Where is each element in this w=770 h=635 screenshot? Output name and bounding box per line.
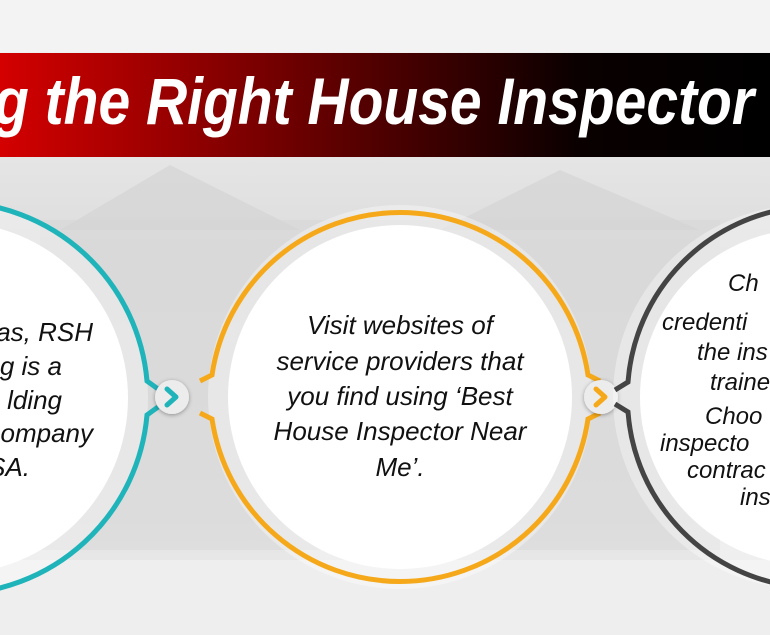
panel: step 1: g is a [0, 351, 62, 381]
panel: step 3: contrac [687, 457, 766, 484]
panel: step 2: service providers that [276, 346, 525, 376]
panel: step 3: traine [710, 369, 770, 396]
panel: step 1: lding [7, 385, 63, 415]
panel: step 1: ompany [0, 418, 95, 448]
panel: step 3: credenti [662, 309, 748, 336]
panel: step 2: Visit websites of [307, 310, 496, 340]
panel: step 3: Choo [705, 403, 762, 430]
panel: step 3: the ins [697, 339, 768, 366]
panel: step 2 [200, 205, 600, 589]
panel: step 3: Ch [728, 270, 759, 297]
panel: step 3: ins [740, 484, 770, 511]
panel: step 1 [0, 202, 158, 594]
arrow 2 [584, 380, 618, 414]
panel: step 2: Me’. [375, 452, 425, 482]
panel: step 2: House Inspector Near [274, 416, 528, 446]
panel: step 2: you find using ‘Best [285, 381, 515, 411]
arrow 1 [155, 380, 189, 414]
panel: step 3 [613, 205, 770, 589]
panel: step 3: inspecto [660, 430, 749, 457]
